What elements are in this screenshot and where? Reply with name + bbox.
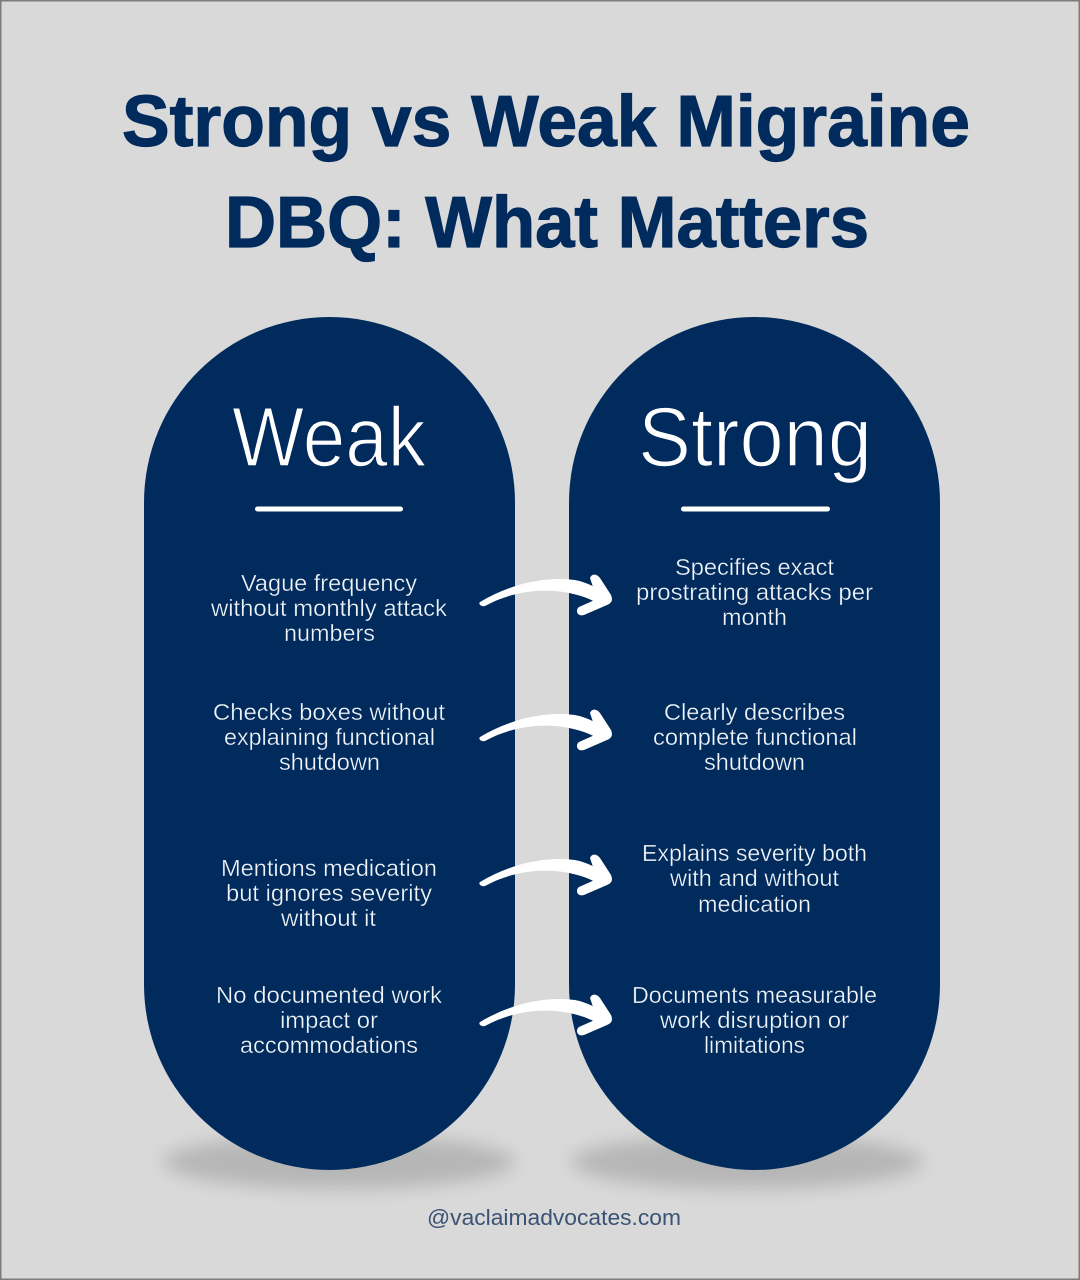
strong point 3: medication: [698, 891, 811, 917]
strong heading: Strong: [638, 390, 872, 484]
weak point 2: [213, 699, 446, 775]
strong point 2: Clearly describes: [664, 699, 845, 725]
weak point 2: shutdown: [279, 749, 380, 775]
arrow 4: [479, 995, 612, 1035]
weak point 3: Mentions medication: [221, 855, 437, 881]
weak heading: Weak: [232, 390, 427, 484]
weak point 2: explaining functional: [224, 724, 435, 750]
strong point 4: Documents measurable: [632, 982, 877, 1008]
title: [122, 82, 970, 263]
strong point 4: [632, 982, 877, 1058]
shadow under strong panel: [571, 1135, 923, 1189]
weak point 1: [210, 570, 448, 646]
weak point 1: without monthly attack: [210, 595, 448, 621]
arrow 2: [479, 710, 612, 750]
strong point 2: complete functional: [653, 724, 857, 750]
strong point 1: prostrating attacks per: [636, 579, 873, 605]
weak point 3: [221, 855, 437, 931]
strong pill background: [569, 317, 940, 1170]
weak point 1: numbers: [284, 620, 375, 646]
weak point 4: No documented work: [216, 982, 443, 1008]
strong point 4: work disruption or: [659, 1007, 849, 1033]
title: DBQ: What Matters: [225, 183, 869, 263]
strong point 2: [653, 699, 857, 775]
weak point 2: Checks boxes without: [213, 699, 446, 725]
weak point 3: but ignores severity: [226, 880, 433, 906]
panel: weak: [144, 317, 515, 1170]
arrow 3: [479, 855, 612, 895]
strong point 1: month: [722, 604, 787, 630]
strong point 3: with and without: [669, 865, 840, 891]
footer handle: @vaclaimadvocates.com: [427, 1205, 681, 1230]
weak point 3: without it: [280, 905, 377, 931]
strong heading underline: [681, 506, 830, 512]
shadow under weak panel: [163, 1135, 515, 1189]
weak point 4: [216, 982, 443, 1058]
strong point 1: Specifies exact: [675, 554, 835, 580]
strong point 3: Explains severity both: [642, 840, 867, 866]
weak point 4: impact or: [280, 1007, 378, 1033]
strong point 1: [636, 554, 873, 630]
arrow 1: [479, 575, 612, 615]
weak point 1: Vague frequency: [241, 570, 418, 596]
panel: strong: [569, 317, 940, 1170]
title: Strong vs Weak Migraine: [122, 82, 970, 162]
strong point 3: [642, 840, 867, 917]
strong point 2: shutdown: [704, 749, 805, 775]
weak pill background: [144, 317, 515, 1170]
weak heading underline: [255, 506, 403, 512]
strong point 4: limitations: [704, 1032, 805, 1058]
weak point 4: accommodations: [240, 1032, 418, 1058]
